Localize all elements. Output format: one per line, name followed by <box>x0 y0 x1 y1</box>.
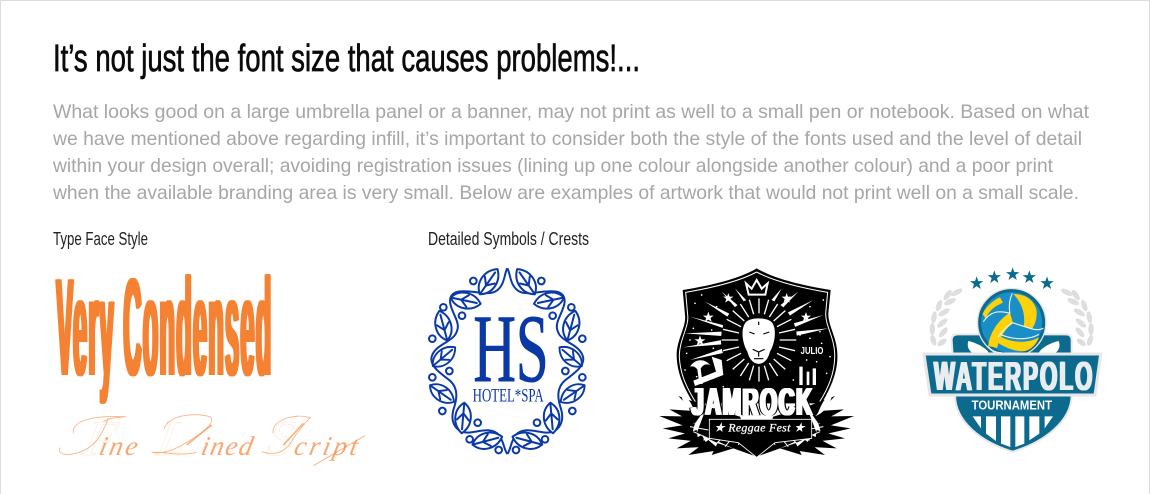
crest: waterpolo <box>924 267 1101 452</box>
intro paragraph: within your design overall; avoiding registration issues (lining up one colour alongside another colour) and a poor print <box>52 155 1054 177</box>
fine lined script sample <box>59 410 368 466</box>
fine lined script sample: ine <box>97 431 153 461</box>
fine lined script sample: cript <box>292 431 364 461</box>
fine lined script sample: L <box>152 410 192 466</box>
stripes <box>973 416 1053 447</box>
intro paragraph: What looks good on a large umbrella panel or a banner, may not print as well to a small pen or notebook. Based on what <box>53 101 1090 123</box>
jamrock wordmark: JAMROCK <box>690 381 812 424</box>
julio tag: JULIO <box>801 346 823 357</box>
fine lined script sample: F <box>79 410 123 466</box>
fine lined script sample: S <box>263 410 299 466</box>
crest: jamrock <box>659 268 854 457</box>
shield <box>952 334 1072 452</box>
title: It’s not just the font size that causes problems!... <box>53 38 640 80</box>
intro paragraph <box>52 101 1090 204</box>
skyline <box>799 367 816 385</box>
very condensed sample: Very Condensed <box>55 250 271 405</box>
ribbon <box>709 419 812 457</box>
crest: hotel spa <box>426 265 589 454</box>
label: type face style: Type Face Style <box>53 229 148 249</box>
intro paragraph: we have mentioned above regarding infill, it’s important to consider both the style of the fonts used and the level of detail <box>52 128 1082 150</box>
label: detailed symbols: Detailed Symbols / Crests <box>428 229 589 249</box>
crown <box>746 280 768 295</box>
speckles <box>684 294 831 387</box>
crest: hotel spa: HOTEL*SPA <box>473 385 544 406</box>
palm <box>690 357 723 386</box>
banner <box>924 354 1101 395</box>
reggae fest: ★ Reggae Fest ★ <box>714 421 806 435</box>
stars <box>970 267 1054 289</box>
splashes <box>968 341 1060 354</box>
intro paragraph: when the available branding area is very small. Below are examples of artwork that would not print well on a small scale. <box>52 182 1079 204</box>
lion <box>721 298 797 382</box>
waterpolo wordmark: WATERPOLO <box>933 353 1093 399</box>
ball <box>978 289 1046 357</box>
crest: hotel spa: HS <box>473 295 549 402</box>
tournament: TOURNAMENT <box>972 398 1052 412</box>
fine lined script sample: ined <box>199 431 266 461</box>
